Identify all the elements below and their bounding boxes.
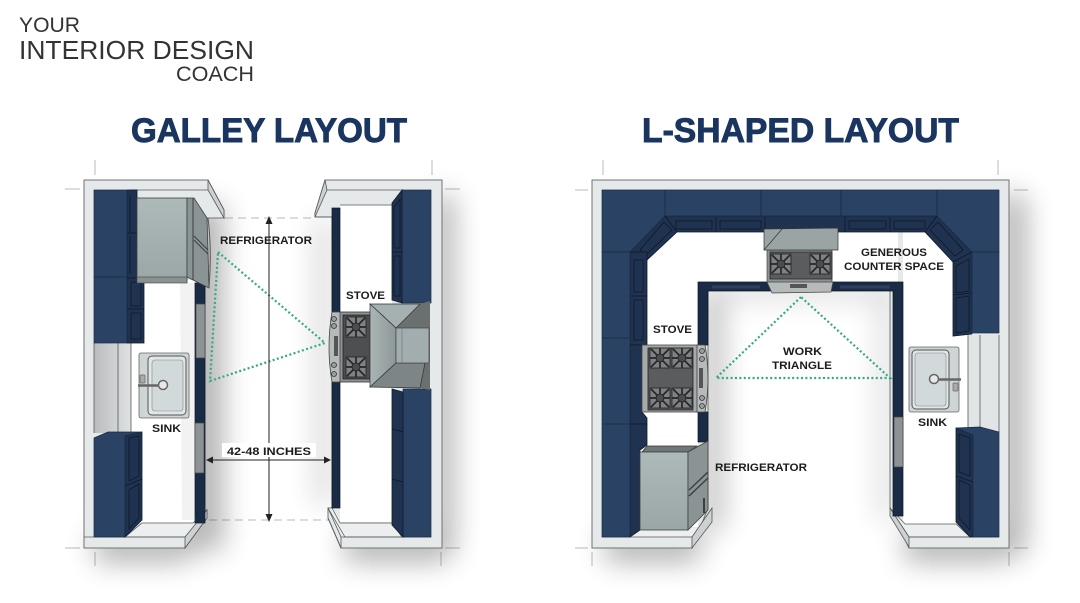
heading: L-shaped layout: L-SHAPED LAYOUT (642, 112, 959, 150)
stove (329, 312, 372, 382)
top stove and hood (764, 228, 838, 293)
work triangle (716, 297, 890, 378)
lower cabinet (392, 389, 431, 537)
right-side counter strip (195, 283, 205, 523)
label: generous counter space: GENEROUS (861, 247, 927, 259)
upper cabinet (392, 190, 431, 303)
panel: L-shaped layout plan (575, 160, 1028, 566)
label: sink: SINK (918, 417, 947, 429)
logo: Your Interior Design Coach: COACH (176, 63, 254, 86)
dimension: 42-48 inches (206, 443, 331, 464)
outer wall frame (592, 180, 1009, 548)
upper cabinet run (602, 190, 999, 262)
dimension: 42-48 inches: 42-48 INCHES (227, 446, 311, 458)
label: work triangle: WORK (783, 346, 822, 358)
sink (909, 347, 961, 412)
label: stove: STOVE (346, 290, 385, 302)
dimension: vertical (266, 216, 272, 522)
refrigerator (640, 441, 708, 530)
refrigerator (137, 198, 210, 288)
label: sink: SINK (152, 423, 181, 435)
logo: Your Interior Design Coach (19, 14, 254, 86)
logo: Your Interior Design Coach: YOUR (19, 14, 80, 37)
inner counter edge (698, 282, 903, 516)
label: work triangle: TRIANGLE (772, 360, 832, 372)
right wall run (315, 180, 442, 548)
label: generous counter space: COUNTER SPACE (844, 261, 944, 273)
lower tall cabinet (94, 432, 142, 537)
label: generous counter space (844, 247, 944, 273)
logo: Your Interior Design Coach: INTERIOR DESIGN (19, 35, 254, 65)
panel: galley layout plan (65, 160, 460, 566)
left cabinet run (602, 252, 647, 537)
right lower cabinet (956, 427, 999, 537)
sink (138, 353, 189, 418)
label: work triangle (772, 346, 832, 372)
label: refrigerator: REFRIGERATOR (220, 235, 312, 247)
label: stove: STOVE (653, 324, 692, 336)
range hood (370, 301, 430, 390)
work triangle (210, 252, 325, 381)
heading: galley layout: GALLEY LAYOUT (131, 112, 407, 150)
left wall run (84, 180, 224, 548)
right upper cabinet (953, 252, 999, 336)
upper cabinets (94, 190, 144, 343)
left stove (642, 345, 708, 412)
label: refrigerator: REFRIGERATOR (715, 462, 807, 474)
opposite counter strip (332, 208, 340, 508)
